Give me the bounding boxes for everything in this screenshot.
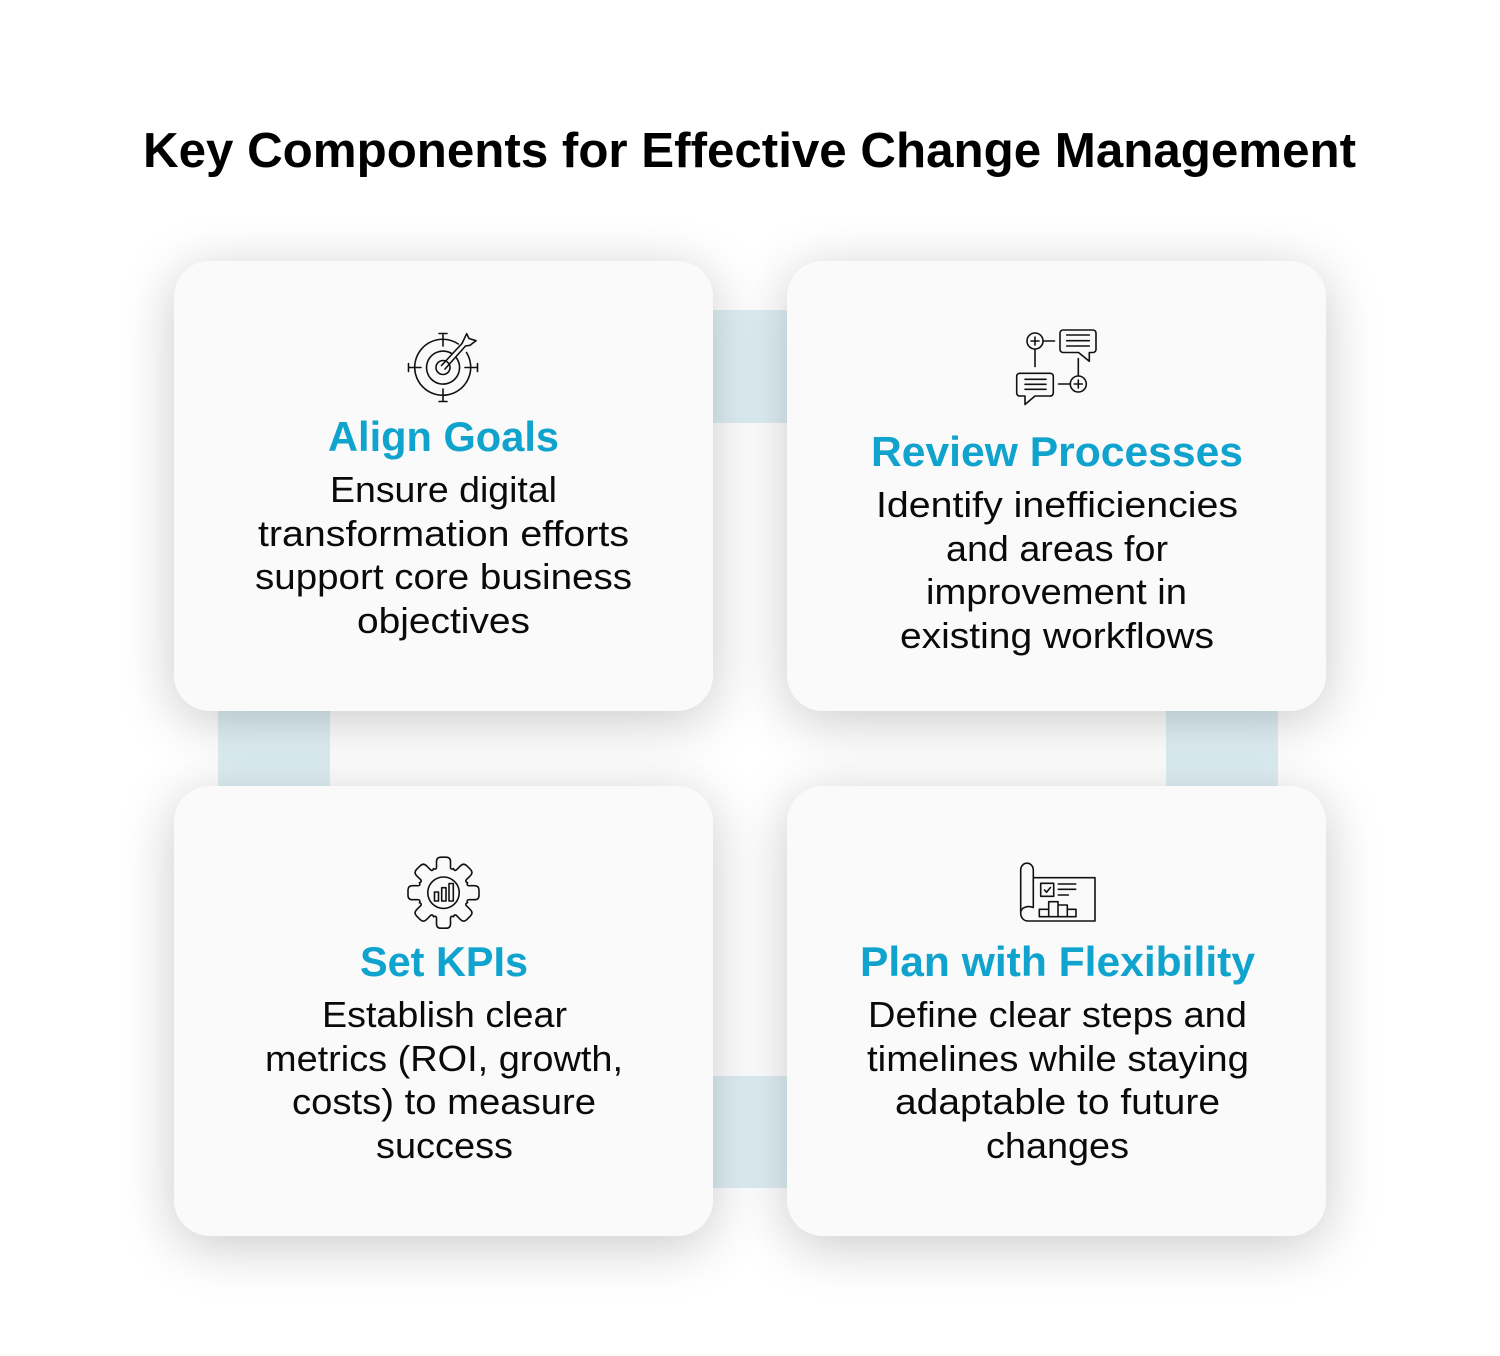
body text xyxy=(265,994,623,1166)
body text: costs) to measure xyxy=(292,1081,596,1122)
connector: goals to processes xyxy=(713,310,787,423)
body text xyxy=(867,994,1249,1166)
body text: transformation efforts xyxy=(258,513,629,554)
body text: adaptable to future xyxy=(895,1081,1220,1122)
icon: blueprint scroll xyxy=(1021,863,1095,921)
panel: Review Processes xyxy=(787,261,1326,711)
body text: timelines while staying xyxy=(867,1038,1249,1079)
connector: KPIs to flexibility xyxy=(713,1076,787,1188)
body text: support core business xyxy=(255,556,632,597)
body text: existing workflows xyxy=(900,615,1214,656)
title: Key Components for Effective Change Management xyxy=(143,124,1356,178)
body text: and areas for xyxy=(946,528,1168,569)
panel: Align Goals xyxy=(174,261,713,711)
body text xyxy=(255,469,632,641)
body text xyxy=(876,484,1238,656)
connector: goals to KPIs xyxy=(218,711,330,786)
heading: Align Goals xyxy=(328,413,559,460)
icon: process speech bubbles xyxy=(1017,330,1096,404)
body text: improvement in xyxy=(926,571,1187,612)
body text: changes xyxy=(986,1125,1129,1166)
connector: processes to flexibility xyxy=(1166,711,1278,786)
icon: gear with bar chart xyxy=(408,857,479,928)
heading: Set KPIs xyxy=(360,938,528,985)
body text: Ensure digital xyxy=(330,469,557,510)
body text: objectives xyxy=(357,600,530,641)
panel: Set KPIs xyxy=(174,786,713,1236)
body text: Establish clear xyxy=(322,994,567,1035)
body text: metrics (ROI, growth, xyxy=(265,1038,623,1079)
panel: Plan with Flexibility xyxy=(787,786,1326,1236)
body text: Identify inefficiencies xyxy=(876,484,1238,525)
body text: success xyxy=(376,1125,513,1166)
heading: Review Processes xyxy=(871,428,1243,475)
body text: Define clear steps and xyxy=(868,994,1247,1035)
icon: target with arrow xyxy=(408,334,478,402)
heading: Plan with Flexibility xyxy=(860,938,1256,985)
